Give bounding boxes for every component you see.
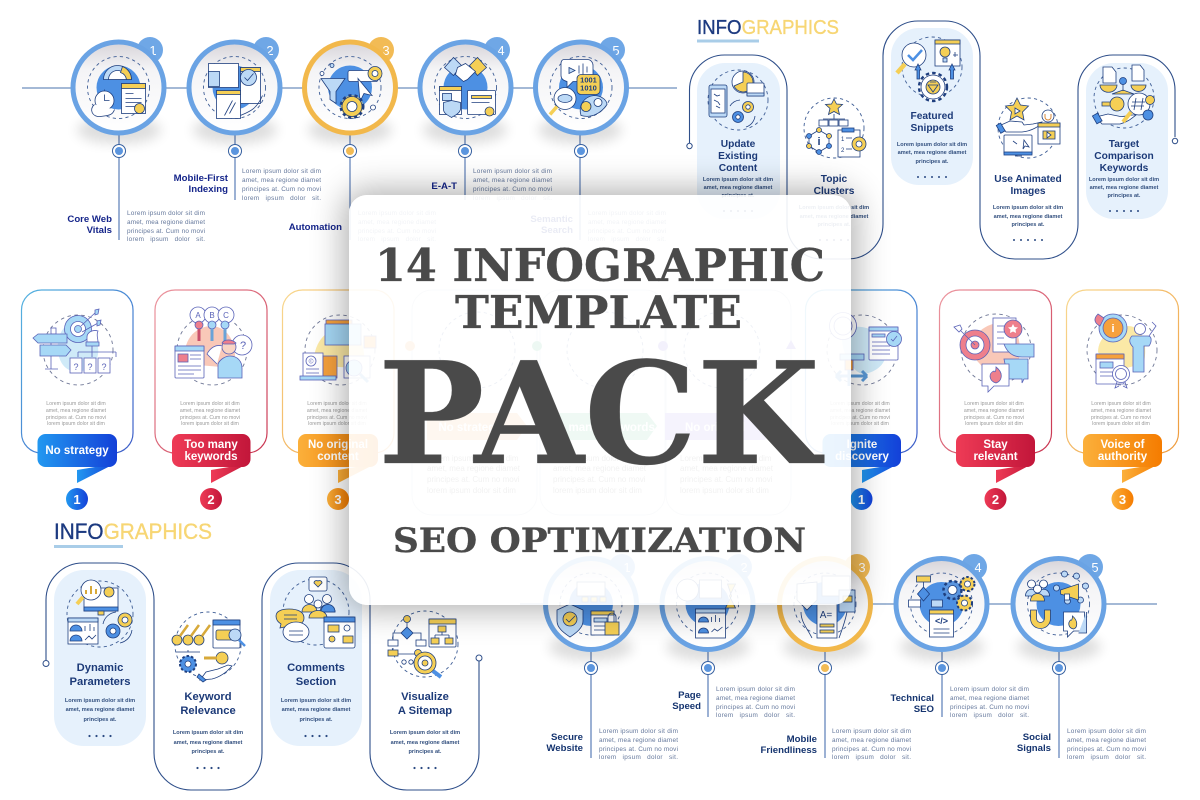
description: amet, mea regione diamet: [588, 219, 666, 226]
description: principes at. Cum no movi: [1067, 746, 1146, 753]
title: Comparison: [1094, 151, 1154, 162]
title: Visualize: [401, 691, 449, 703]
description: Lorem ipsum dolor sit dim: [799, 205, 869, 211]
title: Target: [1109, 139, 1140, 150]
icon: code bubble, eye and gears: 1010: [580, 84, 597, 92]
icon: flowchart, gears, code file: </>: [935, 616, 948, 626]
card: Update Existing Content: [703, 70, 773, 212]
infographic: bottom left cards: [43, 519, 482, 790]
description: amet, mea regione diamet: [473, 177, 552, 184]
description: amet, mea regione diamet: [358, 219, 436, 226]
step 1: Secure Website: [546, 554, 678, 761]
timeline: top left: [22, 37, 677, 243]
description: amet, mea regione diamet: [307, 408, 368, 414]
title: Use Animated: [994, 174, 1062, 185]
number badge: 1: [73, 492, 81, 507]
description: amet, mea regione diamet: [242, 177, 321, 184]
description: principes at. Cum no movi: [830, 415, 890, 421]
description: lorem ipsum dolor sit dim: [1092, 421, 1150, 427]
infographic: faint cards behind the centre panel: lorem ipsum dolor sit dim: [553, 486, 642, 495]
panel: centre title overlay: [349, 195, 851, 605]
description: principes at.: [818, 222, 851, 228]
icon: phone, chart and gears: [708, 70, 768, 130]
description: Lorem ipsum dolor sit dim: [1091, 401, 1151, 407]
icon: star hierarchy and cluster: i: [817, 136, 821, 148]
description: principes at. Cum no movi: [964, 415, 1024, 421]
title: Comments: [287, 662, 345, 674]
description: Lorem ipsum dolor sit dim: [46, 401, 106, 407]
icon: flowchart, gears, code file: [908, 573, 974, 637]
infographic: faint cards behind the centre panel: amet, mea regione diamet: [427, 464, 521, 473]
card: Dynamic Parameters: [65, 580, 135, 737]
description: principes at.: [84, 717, 117, 723]
description: principes at. Cum no movi: [46, 415, 106, 421]
label: Social: [1023, 732, 1051, 743]
step 2: Mobile-First Indexing: 2: [266, 43, 274, 58]
number badge: [200, 488, 222, 510]
number badge: [1112, 488, 1134, 510]
description: amet, mea regione diamet: [66, 707, 134, 713]
title: Snippets: [910, 123, 954, 134]
ribbon label: relevant: [973, 451, 1018, 463]
label: Website: [546, 743, 583, 754]
icon: people and chat bubbles: [276, 577, 355, 648]
icon: star hierarchy and cluster: [804, 98, 866, 158]
icon: handshake and certificate: [434, 56, 496, 118]
description: principes at. Cum no movi: [473, 186, 552, 193]
ribbon label: content: [317, 451, 359, 463]
description: amet, mea regione diamet: [964, 408, 1025, 414]
ribbon label: [298, 434, 378, 483]
description: principes at. Cum no movi: [716, 704, 795, 711]
ribbon label: [38, 434, 117, 483]
label: Friendliness: [760, 745, 817, 756]
label: Search: [541, 225, 573, 236]
description: Lorem ipsum dolor sit dim: [830, 401, 890, 407]
icon: code bubble, eye and gears: 1001: [580, 76, 597, 84]
description: Lorem ipsum dolor sit dim: [127, 210, 205, 217]
step 3: Mobile Friendliness: [760, 554, 911, 761]
description: lorem ipsum dolor sit.: [473, 195, 552, 202]
ribbon label: No strategy: [45, 445, 109, 457]
card: Visualize A Sitemap: [388, 611, 460, 769]
ribbon label: [172, 434, 250, 483]
icon: target, signpost, chess: ?: [101, 362, 107, 372]
description: amet, mea regione diamet: [898, 150, 966, 156]
description: Lorem ipsum dolor sit dim: [897, 142, 967, 148]
ribbon label: [822, 434, 901, 483]
infographic: faint cards behind the centre panel: principes at. Cum no movi: [680, 475, 773, 484]
pagination dots: [88, 735, 112, 737]
icon: scale, key, hash magnifier: [1092, 65, 1154, 128]
description: lorem ipsum dolor sit.: [1067, 754, 1146, 761]
title: Section: [296, 676, 336, 688]
card: Too many keywords: [155, 290, 267, 510]
icon: people, magnet, megaphone, chat flame: [1026, 571, 1090, 637]
icon: target, signpost, chess: ?: [73, 362, 79, 372]
timeline: bottom right: [520, 554, 1157, 761]
label: SEO: [914, 704, 935, 715]
infographic: faint cards behind the centre panel: [405, 290, 796, 515]
label: Indexing: [189, 184, 228, 195]
step 1: Secure Website: 1: [623, 560, 631, 575]
card: Use Animated Images: [993, 98, 1063, 241]
description: Lorem ipsum dolor sit dim: [964, 401, 1024, 407]
infographic: faint cards behind the centre panel: Lorem ipsum dolor sit dim: [553, 454, 645, 463]
ribbon label: [1083, 434, 1162, 483]
card backgrounds: [54, 570, 362, 746]
title: Dynamic: [77, 662, 123, 674]
infographic: faint cards behind the centre panel: lorem ipsum dolor sit dim: [680, 486, 769, 495]
description: amet, mea regione diamet: [46, 408, 107, 414]
description: amet, mea regione diamet: [127, 219, 205, 226]
heading: INFOGRAPHICS: INFOGRAPHICS: [54, 519, 212, 544]
description: principes at.: [409, 749, 442, 755]
infographic: top right cards: [687, 17, 1178, 259]
description: Lorem ipsum dolor sit dim: [390, 730, 460, 736]
description: amet, mea regione diamet: [1067, 737, 1146, 744]
icon: folders, copyright, magnifier: ©: [309, 358, 314, 366]
description: principes at. Cum no movi: [588, 228, 666, 235]
number badge: 2: [992, 492, 999, 507]
icon: devices and mobile check: [204, 56, 266, 118]
description: Lorem ipsum dolor sit dim: [703, 177, 773, 183]
number badge: 1: [858, 492, 865, 507]
card: Voice of authority: [1066, 290, 1178, 510]
label: Automation: [289, 222, 342, 233]
pagination dots: [304, 735, 328, 737]
label: Semantic: [530, 214, 574, 225]
number badge: [984, 488, 1006, 510]
icon: flame target, strong person, badge: i: [1111, 323, 1115, 335]
description: principes at. Cum no movi: [307, 415, 367, 421]
infographic: faint cards behind the centre panel: No original: [685, 422, 745, 434]
description: principes at.: [300, 717, 333, 723]
icon: stopwatch, hourglass, dashboard: [676, 573, 738, 638]
title: 14 Infographic: 14 INFOGRAPHIC: [375, 239, 825, 292]
icon: keys and person: C: [223, 311, 229, 320]
icon: keys, window, gear, key in hand: [172, 612, 245, 682]
icon: folders, copyright, magnifier: [300, 315, 376, 385]
label: Core Web: [67, 214, 112, 225]
title: Parameters: [70, 676, 130, 688]
card backgrounds: [697, 28, 1168, 219]
step 5: Semantic Search: [530, 37, 666, 243]
title: A Sitemap: [398, 705, 452, 717]
icon: shield, window, padlock: [557, 573, 622, 637]
description: principes at. Cum no movi: [127, 228, 205, 235]
ribbon label: Voice of: [1101, 439, 1145, 451]
description: Lorem ipsum dolor sit dim: [358, 210, 436, 217]
description: principes at. Cum no movi: [180, 415, 240, 421]
description: lorem ipsum dolor sit.: [950, 712, 1029, 719]
description: amet, mea regione diamet: [1090, 185, 1158, 191]
icon: monitor, dashboard, gears: [67, 580, 133, 647]
icon: tablet in hands: [794, 573, 856, 638]
description: amet, mea regione diamet: [599, 737, 678, 744]
card: No original content: [282, 290, 394, 510]
description: amet, mea regione diamet: [830, 408, 891, 414]
step 4: E-A-T: [420, 37, 552, 202]
infographic: faint cards behind the centre panel: Lorem ipsum dolor sit dim: [680, 454, 772, 463]
description: lorem ipsum dolor sit.: [242, 195, 321, 202]
step 3: Automation: [289, 37, 436, 243]
icon: star hierarchy and cluster: 1: [841, 137, 845, 143]
number badge: [850, 488, 872, 510]
step 1: Core Web Vitals: 1: [149, 43, 157, 58]
description: Lorem ipsum dolor sit dim: [65, 698, 135, 704]
heading: INFOGRAPHICS: INFOGRAPHICS: [697, 17, 839, 39]
label: Technical: [890, 693, 934, 704]
icon: target, signpost, chess: [33, 309, 116, 385]
icon: keys and person: A: [195, 311, 201, 320]
label: Page: [678, 690, 701, 701]
step 4: E-A-T: 4: [497, 43, 505, 58]
ribbon label: keywords: [184, 451, 238, 463]
ribbon label: Ignite: [847, 439, 877, 451]
connector outline: [46, 563, 479, 790]
pagination dots: [196, 767, 220, 769]
description: lorem ipsum dolor sit.: [358, 236, 436, 243]
title: Pack: PACK: [378, 332, 824, 497]
icon: target, signpost, chess: ?: [87, 362, 93, 372]
description: amet, mea regione diamet: [716, 695, 795, 702]
icon: star in hand, monitor, video: [996, 98, 1060, 158]
icon: compass, checklist, arrows: [827, 312, 902, 386]
title: Update: [721, 139, 756, 150]
infographic: faint cards behind the centre panel: amet, mea regione diamet: [553, 464, 647, 473]
pagination dots: [1013, 239, 1043, 241]
description: principes at.: [722, 193, 755, 199]
number badge: 3: [1119, 492, 1126, 507]
description: principes at.: [1012, 222, 1045, 228]
description: amet, mea regione diamet: [1091, 408, 1152, 414]
infographic: faint cards behind the centre panel: principes at. Cum no movi: [427, 475, 520, 484]
title: Clusters: [814, 186, 855, 197]
infographic: faint cards behind the centre panel: No strategy: [438, 422, 502, 434]
icon: star hierarchy and cluster: 2: [841, 148, 845, 154]
step 3: Mobile Friendliness: 3: [858, 560, 866, 575]
subtitle: SEO Optimization: SEO OPTIMIZATION: [393, 521, 806, 561]
ribbon label: authority: [1098, 451, 1148, 463]
step 1: Core Web Vitals: [67, 37, 205, 243]
description: Lorem ipsum dolor sit dim: [1067, 728, 1146, 735]
icon: keys and person: [175, 307, 252, 385]
description: amet, mea regione diamet: [391, 740, 459, 746]
step 5: Social Signals: [1013, 554, 1146, 761]
description: Lorem ipsum dolor sit dim: [473, 168, 552, 175]
card: Ignite discovery: [806, 290, 917, 510]
pagination dots: [819, 239, 849, 241]
pagination dots: [1109, 210, 1139, 212]
description: Lorem ipsum dolor sit dim: [242, 168, 321, 175]
card: Target Comparison Keywords: [1089, 65, 1159, 212]
ribbon label: No original: [308, 439, 368, 451]
label: Signals: [1017, 743, 1051, 754]
description: lorem ipsum dolor sit dim: [831, 421, 889, 427]
description: lorem ipsum dolor sit.: [832, 754, 911, 761]
label: Speed: [672, 701, 701, 712]
description: Lorem ipsum dolor sit dim: [281, 698, 351, 704]
icon: flowchart, sitemap, magnifier: [388, 611, 458, 677]
number badge: [327, 488, 349, 510]
icon: target, checklist, chat flame: [954, 314, 1034, 392]
infographic: faint cards behind the centre panel: Too many keywords: [545, 422, 655, 434]
label: Vitals: [87, 225, 112, 236]
description: amet, mea regione diamet: [180, 408, 241, 414]
description: principes at. Cum no movi: [950, 704, 1029, 711]
step 2: Mobile-First Indexing: [174, 37, 321, 202]
title: Content: [719, 163, 758, 174]
description: lorem ipsum dolor sit.: [127, 236, 205, 243]
infographic: faint cards behind the centre panel: amet, mea regione diamet: [680, 464, 774, 473]
description: lorem ipsum dolor sit.: [599, 754, 678, 761]
title: Featured: [910, 111, 954, 122]
description: Lorem ipsum dolor sit dim: [716, 686, 795, 693]
icon: gauge, stopwatch and window: [88, 56, 150, 118]
description: Lorem ipsum dolor sit dim: [180, 401, 240, 407]
label: E-A-T: [431, 181, 457, 192]
description: amet, mea regione diamet: [282, 707, 350, 713]
description: Lorem ipsum dolor sit dim: [950, 686, 1029, 693]
step 5: Semantic Search: 5: [612, 43, 620, 58]
title: Existing: [718, 151, 758, 162]
step 3: Automation: 3: [382, 43, 390, 58]
description: principes at.: [192, 749, 225, 755]
description: lorem ipsum dolor sit.: [588, 236, 666, 243]
icon: keys and person: ?: [240, 340, 246, 352]
title: Relevance: [180, 705, 236, 717]
description: Lorem ipsum dolor sit dim: [173, 730, 243, 736]
description: principes at. Cum no movi: [832, 746, 911, 753]
description: Lorem ipsum dolor sit dim: [1089, 177, 1159, 183]
icon: tablet in hands: A=: [820, 610, 832, 621]
title: Template: TEMPLATE: [455, 286, 742, 339]
description: Lorem ipsum dolor sit dim: [599, 728, 678, 735]
description: Lorem ipsum dolor sit dim: [307, 401, 367, 407]
step 4: Technical SEO: 4: [974, 560, 982, 575]
description: principes at. Cum no movi: [242, 186, 321, 193]
number badge: [66, 488, 88, 510]
description: Lorem ipsum dolor sit dim: [588, 210, 666, 217]
title: Topic: [821, 174, 848, 185]
icon: keys and person: B: [209, 311, 215, 320]
description: principes at.: [916, 159, 949, 165]
card: Comments Section: [276, 577, 355, 737]
description: lorem ipsum dolor sit dim: [181, 421, 239, 427]
description: amet, mea regione diamet: [832, 737, 911, 744]
pagination dots: [917, 176, 947, 178]
card: Keyword Relevance: [172, 612, 245, 769]
title: Images: [1010, 186, 1046, 197]
description: principes at. Cum no movi: [1091, 415, 1151, 421]
number badge: 2: [207, 492, 215, 507]
card: Topic Clusters: [799, 98, 869, 241]
description: principes at. Cum no movi: [358, 228, 436, 235]
label: Secure: [551, 732, 583, 743]
card: Featured Snippets: [897, 37, 967, 178]
description: lorem ipsum dolor sit dim: [308, 421, 366, 427]
pagination dots: [413, 767, 437, 769]
description: principes at. Cum no movi: [599, 746, 678, 753]
description: lorem ipsum dolor sit dim: [47, 421, 105, 427]
icon: funnel, gear, cursor: [319, 56, 382, 118]
label: Mobile: [787, 734, 817, 745]
description: lorem ipsum dolor sit.: [716, 712, 795, 719]
step 4: Technical SEO: [890, 554, 1029, 719]
description: lorem ipsum dolor sit dim: [965, 421, 1023, 427]
step 5: Social Signals: 5: [1091, 560, 1099, 575]
infographic: faint cards behind the centre panel: principes at. Cum no movi: [553, 475, 646, 484]
infographic: faint cards behind the centre panel: Lorem ipsum dolor sit dim: [427, 454, 519, 463]
title: Keyword: [184, 691, 232, 703]
ribbon label: Stay: [983, 439, 1008, 451]
title: Keywords: [1100, 163, 1149, 174]
description: amet, mea regione diamet: [704, 185, 772, 191]
step 2: Page Speed: 2: [740, 560, 748, 575]
description: amet, mea regione diamet: [174, 740, 242, 746]
label: Mobile-First: [174, 173, 229, 184]
icon: code bubble, eye and gears: [550, 56, 612, 118]
description: amet, mea regione diamet: [994, 214, 1062, 220]
pagination dots: [723, 210, 753, 212]
description: principes at.: [1108, 193, 1141, 199]
description: amet, mea regione diamet: [950, 695, 1029, 702]
icon: magnifier, bulb and diamond gear: [897, 37, 962, 101]
icon: flame target, strong person, badge: [1087, 314, 1157, 388]
ribbon label: [956, 434, 1035, 483]
connector outline: [690, 21, 1175, 259]
description: Lorem ipsum dolor sit dim: [993, 205, 1063, 211]
description: Lorem ipsum dolor sit dim: [832, 728, 911, 735]
description: amet, mea regione diamet: [800, 214, 868, 220]
ribbon label: discovery: [835, 451, 889, 463]
ribbon label: Too many: [184, 439, 238, 451]
card: No strategy: [22, 290, 133, 510]
number badge: 3: [334, 492, 342, 507]
infographic: faint cards behind the centre panel: lorem ipsum dolor sit dim: [427, 486, 516, 495]
step 2: Page Speed: [662, 554, 795, 719]
card: Stay relevant: [940, 290, 1052, 510]
